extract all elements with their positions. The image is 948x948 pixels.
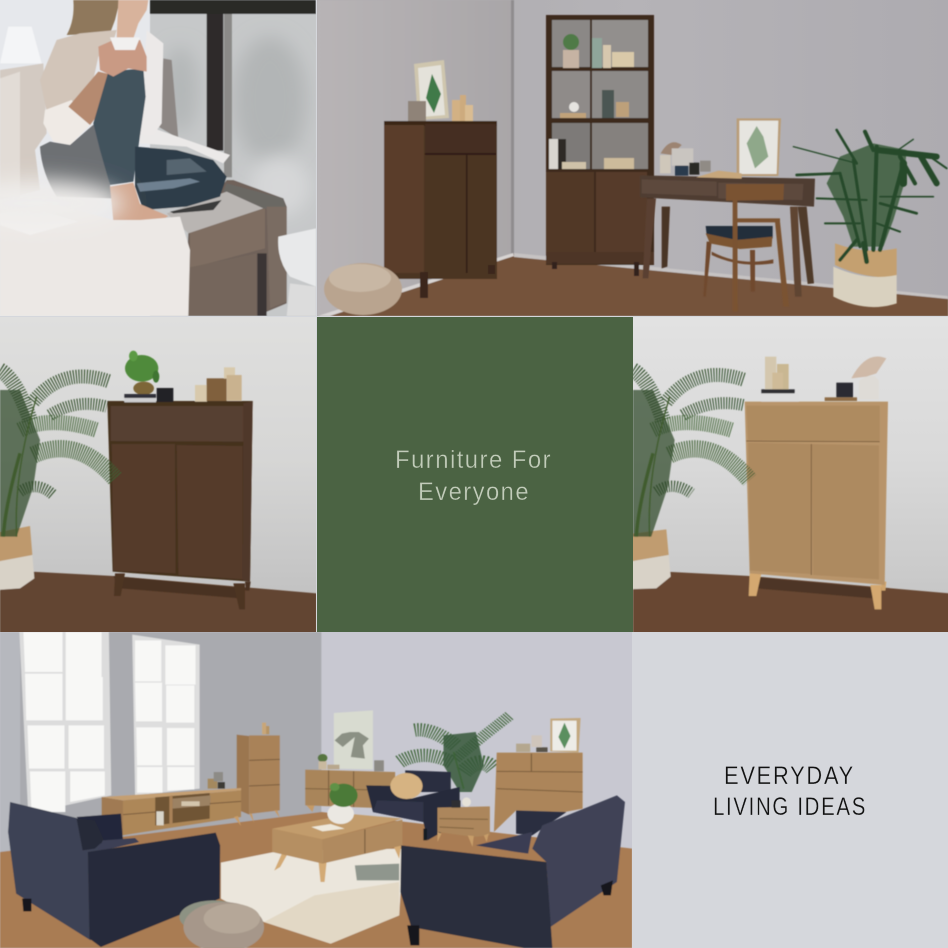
beige shirt (40, 30, 117, 112)
oak shoe cabinet (745, 402, 888, 609)
palm fronds (633, 370, 750, 537)
fur pouf in basket (179, 900, 264, 948)
tall oak cabinet (237, 723, 280, 823)
cushion (390, 773, 423, 799)
oak side table (437, 797, 490, 847)
palm fronds (0, 370, 115, 537)
navy armchair (366, 770, 460, 840)
floor (0, 812, 632, 948)
title: Furniture For Everyone: Furniture For (395, 446, 552, 474)
white blanket (113, 216, 191, 316)
potted palm in basket (793, 130, 947, 307)
decor on oak cabinet (761, 356, 886, 402)
title: Furniture For Everyone: Everyone (418, 478, 530, 506)
panel: woman with a mug on a sofa (0, 0, 317, 320)
caption: Everyday Living Ideas: LIVING IDEAS (713, 793, 867, 821)
arm (68, 72, 113, 125)
panel: dark walnut study room (317, 0, 948, 316)
hands and mug (98, 40, 147, 77)
panel: light oak cabinet with palm (630, 317, 948, 640)
basket planter (0, 526, 34, 590)
palm plant behind armchair (399, 715, 510, 792)
panel: green title block (317, 317, 633, 633)
basket planter (630, 529, 671, 589)
panel: dark cabinet with palm (0, 317, 317, 640)
panel: living room with navy sofas (0, 632, 632, 948)
sofa arm and base (187, 180, 287, 316)
title: Furniture For Everyone (395, 446, 552, 506)
bent jeans leg (135, 147, 227, 210)
left navy sofa (8, 802, 220, 947)
tall walnut cabinet (384, 121, 497, 298)
dining chair (703, 184, 789, 312)
right navy sofa (400, 795, 625, 948)
rug (221, 849, 403, 944)
walnut bookcase (546, 15, 654, 276)
caption: Everyday Living Ideas: EVERYDAY (724, 762, 855, 790)
cream throw (0, 63, 47, 200)
picture and ornaments on cabinet (408, 60, 473, 121)
walnut shoe cabinet (107, 401, 253, 609)
potted plant on table (327, 783, 358, 824)
oak floor (633, 570, 948, 640)
oak sideboard with painting (305, 710, 395, 812)
tall oak drawers with picture (494, 718, 583, 832)
left window (19, 632, 111, 814)
caption: Everyday Living Ideas (713, 762, 867, 821)
right window (132, 635, 200, 795)
upright jeans leg (93, 68, 146, 185)
oak coffee table (272, 783, 402, 882)
fur pouf (324, 263, 402, 315)
face (117, 0, 148, 38)
floor (0, 570, 317, 640)
oak TV console (102, 772, 241, 835)
panel: grey caption block (632, 632, 948, 948)
floor (320, 254, 948, 316)
decor on dark cabinet (124, 351, 242, 402)
walnut desk with picture (640, 118, 815, 297)
white shirt back (140, 32, 164, 130)
foot (110, 183, 168, 223)
hair (67, 0, 120, 35)
dark hip (40, 123, 112, 198)
